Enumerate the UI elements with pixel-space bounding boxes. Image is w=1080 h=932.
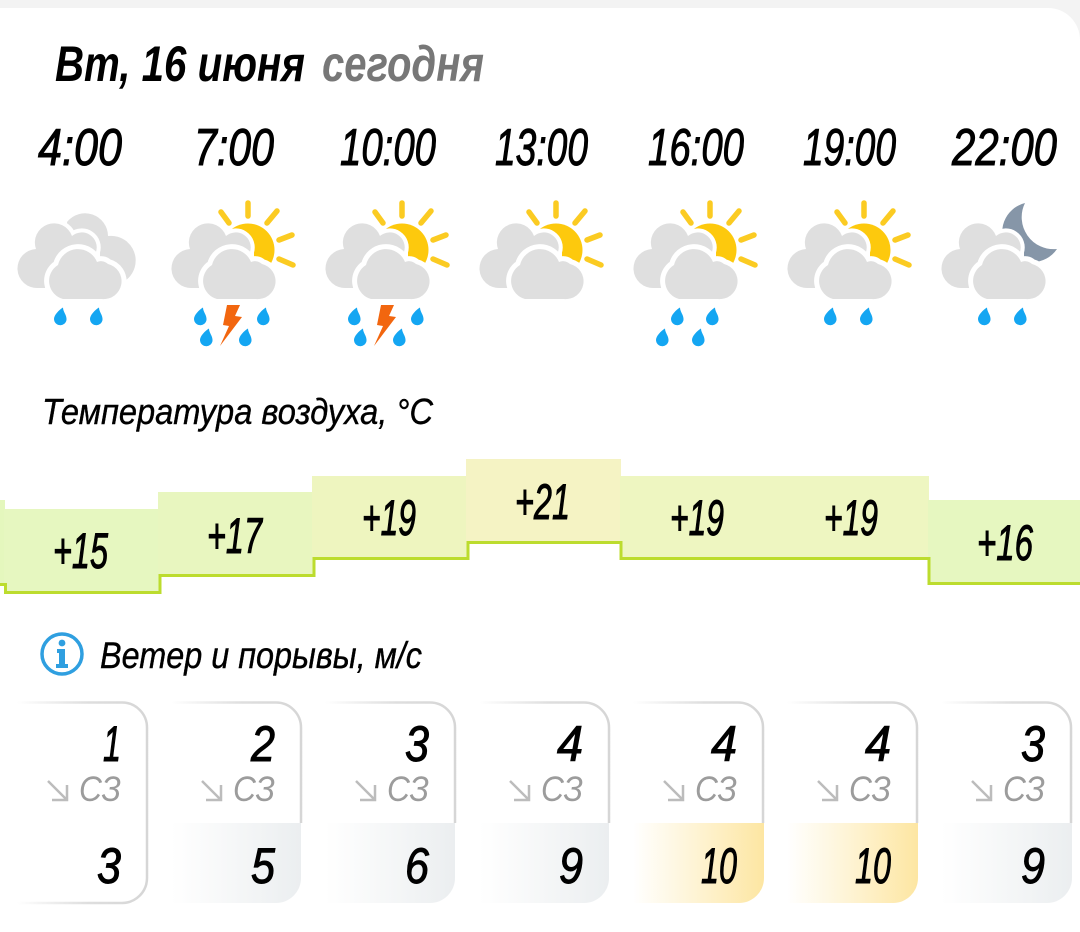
wind cell 13:00: СЗ [541,770,583,809]
wind cell 16:00: 4 [711,716,737,772]
wind cell 22:00: 9 [1021,838,1045,894]
icon: 22:00 night cloudy light rain [941,203,1057,325]
wind cell 10:00: 3 [405,716,429,772]
wind cell 19:00: СЗ [849,770,891,809]
wind cell 7:00: 5 [251,838,275,894]
wind cell 13:00: 9 [559,838,583,894]
temperature step chart: +19 [362,490,416,546]
wind cell 7:00 [171,702,301,903]
wind cell 13:00 [479,702,609,903]
icon: 13:00 partly cloudy [479,203,601,299]
wind cell 10:00 [325,702,455,903]
icon: 10:00 partly cloudy thunderstorm [325,203,447,346]
wind cell 4:00 [17,702,147,903]
wind cell 16:00: 10 [701,838,737,894]
wind cell 4:00: 3 [97,838,121,894]
wind cell 22:00 [941,702,1072,903]
hour labels: 22:00 [951,119,1057,177]
wind cell 19:00 [787,702,918,903]
hour labels: 19:00 [803,119,896,177]
icon: 19:00 partly cloudy light rain [787,203,909,325]
temperature step chart: +21 [515,474,570,530]
wind cell 22:00: СЗ [1003,770,1045,809]
temperature step chart [0,459,1080,593]
title: Вт, 16 июня [55,36,305,92]
wind cell 22:00: 3 [1021,716,1045,772]
wind cell 4:00: СЗ [79,770,121,809]
hour labels [38,119,1057,177]
hour labels: 13:00 [495,119,588,177]
icon: 16:00 partly cloudy rain [633,203,755,346]
hour labels: 10:00 [340,119,436,177]
wind cell 10:00: СЗ [387,770,429,809]
heading: wind and gusts: Ветер и порывы, м/с [100,635,422,676]
temperature step chart: +16 [977,515,1033,571]
wind cell 19:00: 10 [855,838,891,894]
wind cell 7:00: СЗ [233,770,275,809]
wind cell 16:00: СЗ [695,770,737,809]
wind cell 10:00: 6 [405,838,429,894]
icon: info [42,634,82,674]
hour labels: 16:00 [648,119,744,177]
wind cell 16:00 [633,702,764,903]
icon: 7:00 partly cloudy thunderstorm [171,203,293,346]
hour labels: 7:00 [194,119,274,177]
wind cell 4:00: 1 [103,716,121,772]
title: сегодня [322,36,484,92]
temperature step chart: +19 [670,490,724,546]
temperature step chart: +17 [207,508,263,564]
wind cell 19:00: 4 [865,716,891,772]
heading: air temperature: Температура воздуха, °C [42,391,434,432]
temperature step chart: +15 [53,523,108,579]
icon: 4:00 cloudy light rain [17,213,136,325]
wind cell 7:00: 2 [250,716,275,772]
hour labels: 4:00 [38,119,122,177]
temperature step chart: +19 [824,490,878,546]
wind cell 13:00: 4 [557,716,583,772]
